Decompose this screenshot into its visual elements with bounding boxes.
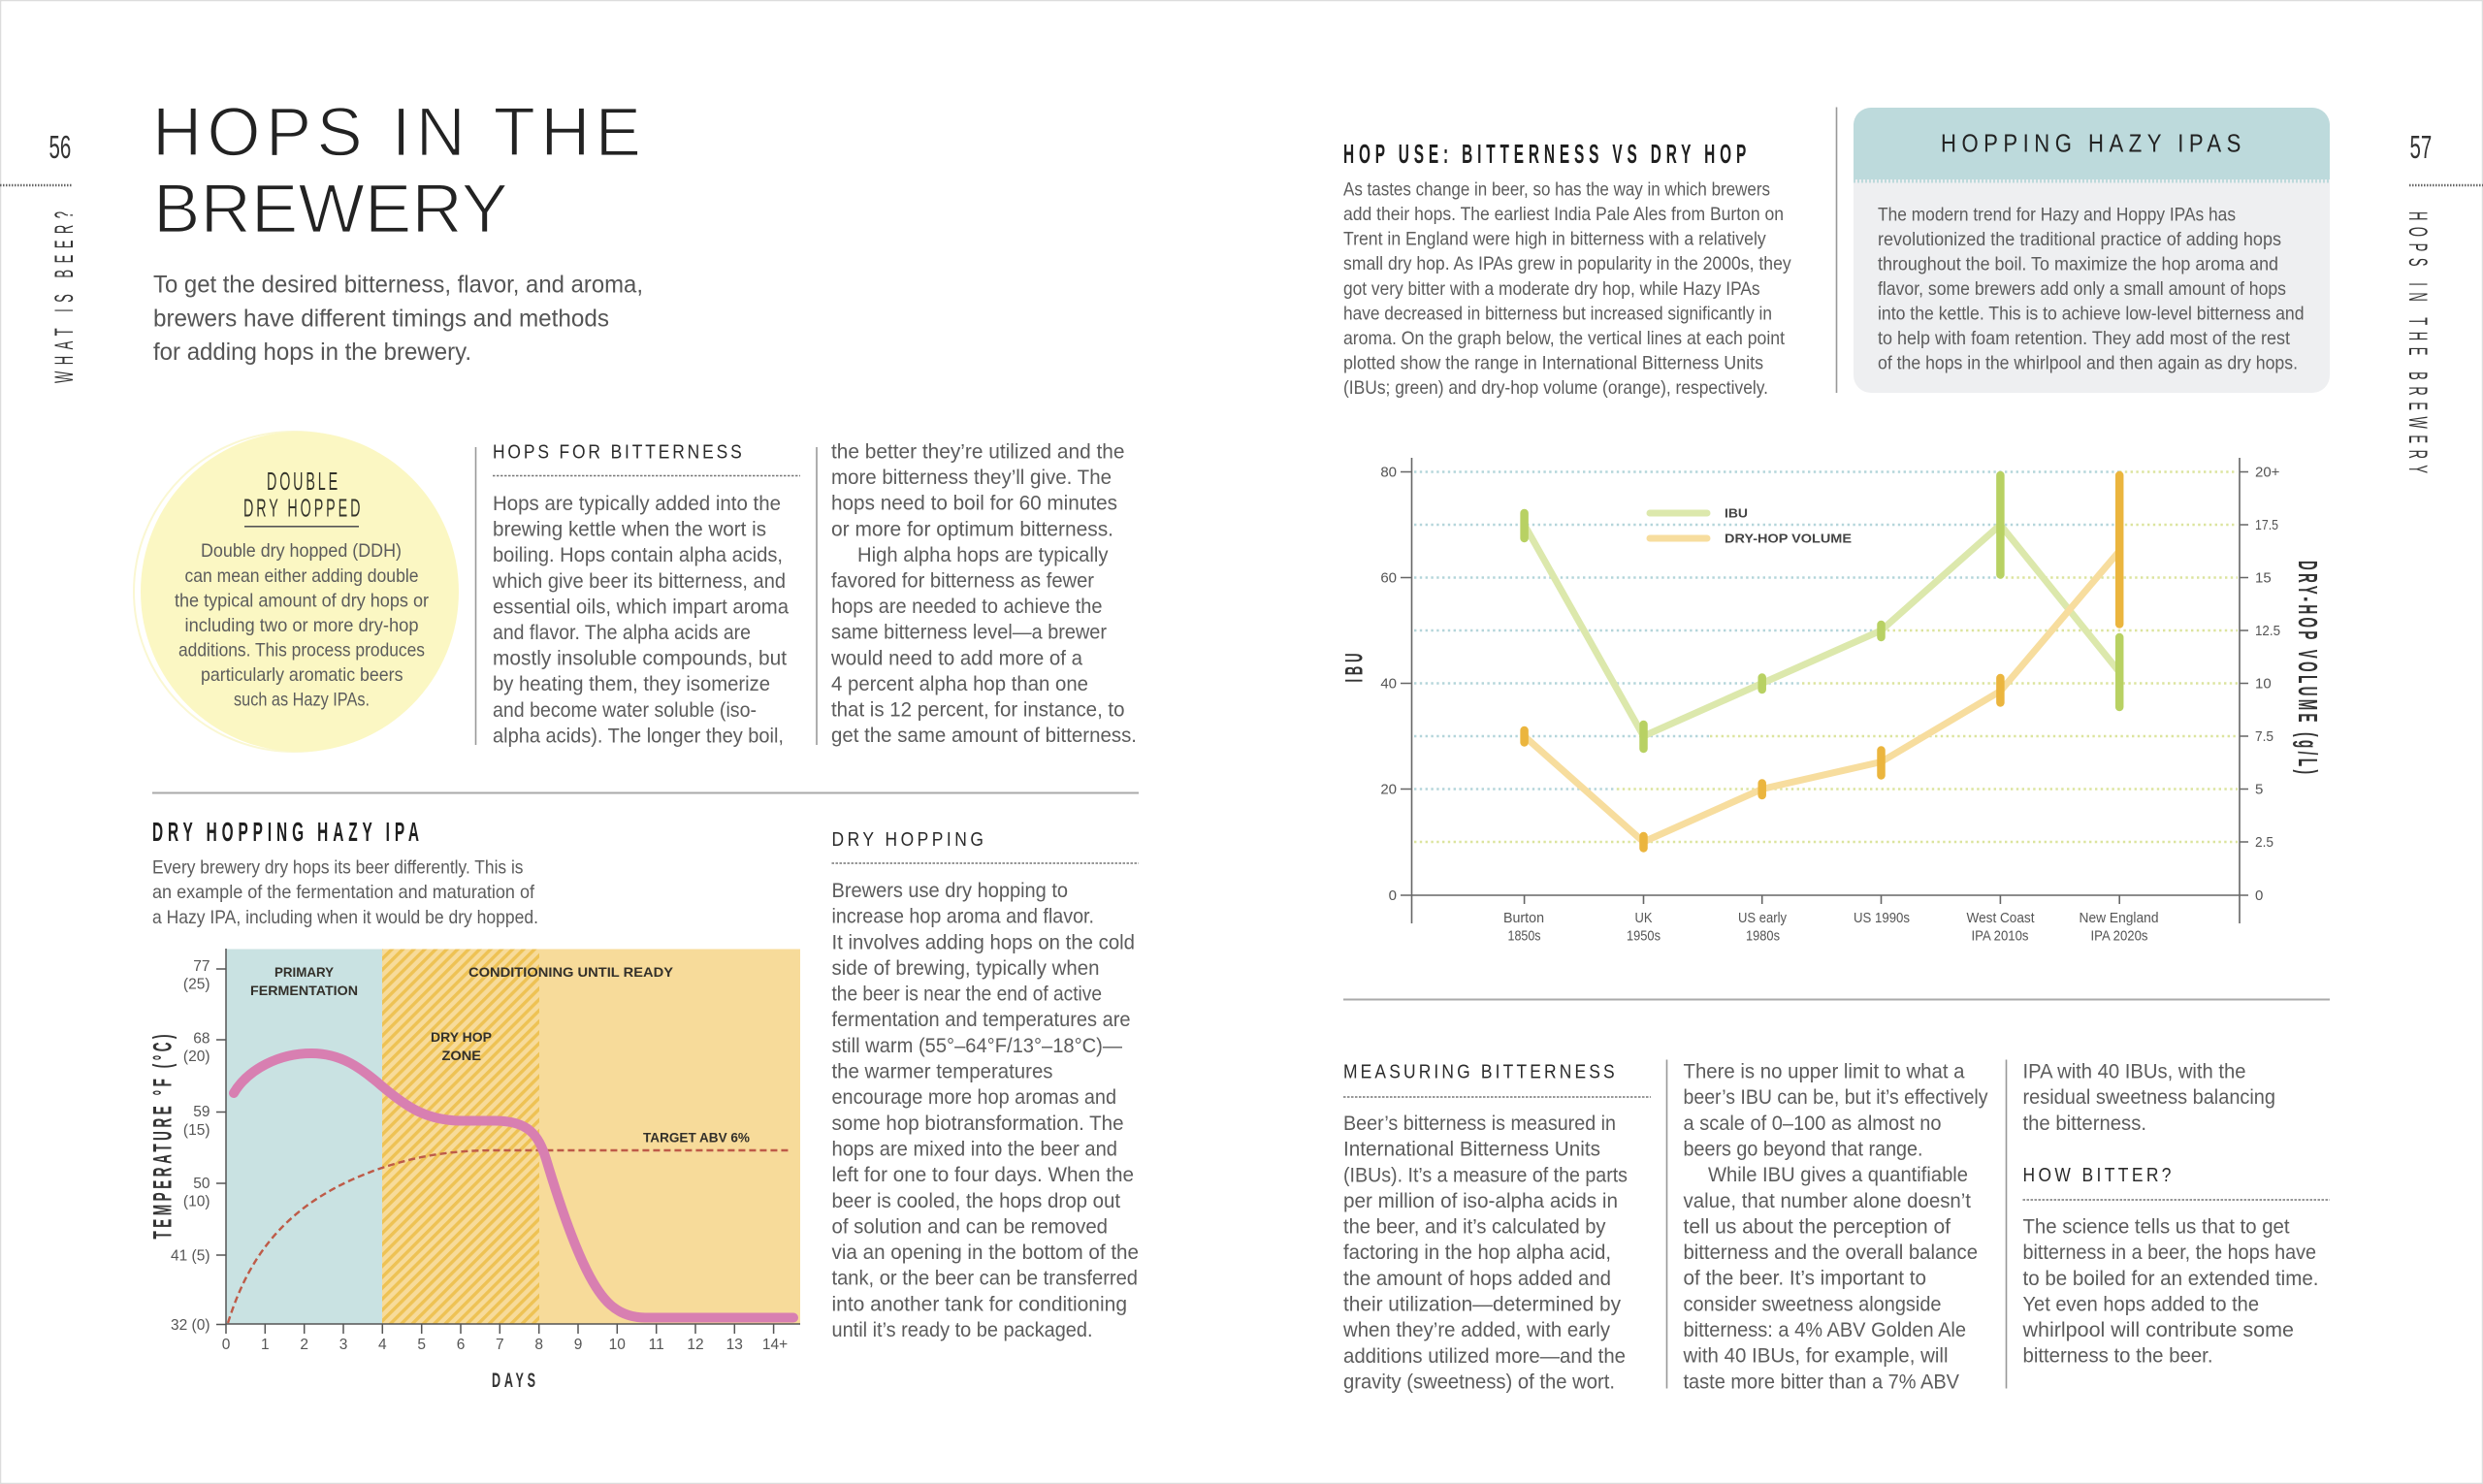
measuring column two: There is no upper limit to what a: [1684, 1061, 1965, 1082]
hop use text: small dry hop. As IPAs grew in popularity in the 2000s, they: [1343, 253, 1791, 274]
panel: how bitter: [2021, 1165, 2330, 1368]
x axis labels: 1950s: [1627, 927, 1661, 945]
right axis labels: 5: [2255, 782, 2263, 797]
title: [152, 95, 641, 248]
dry hopping body: [832, 880, 1139, 1341]
dry hopping body: the beer is near the end of active: [832, 984, 1102, 1006]
hop use text: got very bitter with a moderate dry hop, while Hazy IPAs: [1343, 278, 1760, 300]
dry hopping body: still warm (55°–64°F/13°–18°C)—: [832, 1035, 1122, 1057]
dry hopping body: side of brewing, typically when: [832, 957, 1100, 980]
legend: DRY-HOP VOLUME: [1725, 532, 1852, 545]
body column one: alpha acids). The longer they boil,: [493, 725, 784, 747]
measuring column three: [2023, 1061, 2275, 1135]
dry hopping body: beer is cooled, the hops drop out: [832, 1190, 1120, 1212]
measuring column two: taste more bitter than a 7% ABV: [1684, 1371, 1959, 1393]
axes: [1401, 458, 2248, 923]
dry hopping body: via an opening in the bottom of the: [832, 1242, 1139, 1264]
x axis labels: 7: [496, 1337, 504, 1353]
zone labels: DRY HOP: [431, 1029, 492, 1045]
callout text: of the hops in the whirlpool and then again as dry hops.: [1878, 353, 2298, 374]
body column one: by heating them, they isomerize: [493, 673, 770, 695]
body column one: essential oils, which impart aroma: [493, 596, 789, 618]
measuring column one: (IBUs). It’s a measure of the parts: [1343, 1164, 1628, 1186]
right axis labels: 12.5: [2255, 623, 2280, 639]
left axis labels: 40: [1380, 675, 1397, 693]
measuring column two: a scale of 0–100 as almost no: [1684, 1113, 1942, 1135]
intro text: for adding hops in the brewery.: [153, 339, 471, 366]
circle text: [175, 540, 429, 710]
x axis labels: IPA 2010s: [1971, 927, 2029, 945]
x axis labels: 1850s: [1507, 927, 1540, 945]
heading: hops for bitterness: HOPS FOR BITTERNESS: [493, 441, 742, 464]
dry hopping body: tank, or the beer can be transferred: [832, 1268, 1138, 1290]
axes: [216, 949, 800, 1334]
y axis labels: (10): [183, 1193, 210, 1210]
chart: IBU and dry-hop volume over time: [1341, 458, 2323, 945]
body column two: or more for optimum bitterness.: [831, 518, 1113, 540]
body column two: the better they’re utilized and the: [831, 440, 1125, 464]
callout text: The modern trend for Hazy and Hoppy IPAs has: [1878, 204, 2236, 225]
dry hopping body: increase hop aroma and flavor.: [832, 906, 1094, 928]
how bitter body: whirlpool will contribute some: [2021, 1319, 2294, 1341]
measuring column three: residual sweetness balancing: [2023, 1086, 2275, 1109]
page number: 56: 56: [48, 129, 71, 165]
body column one: and flavor. The alpha acids are: [493, 622, 751, 644]
measuring column one: per million of iso-alpha acids in: [1343, 1190, 1618, 1212]
body column two: [830, 440, 1137, 747]
how bitter body: The science tells us that to get: [2023, 1216, 2290, 1238]
circle text: such as Hazy IPAs.: [234, 689, 370, 710]
y axis labels: 32 (0): [171, 1317, 210, 1334]
x axis labels: 3: [339, 1337, 347, 1353]
panel: double dry hopped circle: [134, 432, 459, 752]
x axis labels: Burton: [1503, 910, 1544, 926]
y axis labels: 68: [193, 1030, 210, 1048]
right axis labels: 10: [2255, 675, 2272, 693]
x axis labels: US early: [1738, 910, 1787, 926]
body column one: Hops are typically added into the: [493, 493, 781, 515]
circle text: additions. This process produces: [178, 640, 425, 661]
right axis labels: 0: [2255, 887, 2263, 904]
line: temperature curve: [234, 1053, 793, 1317]
zone labels: TARGET ABV 6%: [643, 1129, 751, 1145]
line: IBU trend: [1525, 525, 2119, 736]
dry hopping body: some hop biotransformation. The: [832, 1113, 1123, 1135]
panel: measuring bitterness: [1342, 1059, 2275, 1393]
gridlines: [1414, 471, 2238, 842]
zone labels: [250, 964, 751, 1145]
dry hopping body: hops are mixed into the beer and: [832, 1139, 1117, 1160]
x axis labels: 4: [378, 1337, 387, 1353]
callout text: [1878, 204, 2305, 374]
intro text: [153, 272, 643, 366]
x axis title: DAYS: [492, 1369, 535, 1392]
y axis labels: (15): [183, 1122, 210, 1139]
page number: 57: 57: [2409, 129, 2432, 165]
how bitter body: bitterness to the beer.: [2023, 1345, 2213, 1368]
body column two: 4 percent alpha hop than one: [831, 673, 1088, 695]
section label: What is beer?: WHAT IS BEER?: [50, 211, 79, 383]
x axis labels: 9: [574, 1337, 582, 1353]
right axis labels: 2.5: [2255, 834, 2273, 851]
body column two: more bitterness they’ll give. The: [831, 467, 1112, 489]
x axis labels: West Coast: [1967, 910, 2035, 926]
x axis labels: [222, 1337, 788, 1353]
left axis labels: 80: [1380, 464, 1397, 481]
how bitter body: Yet even hops added to the: [2023, 1293, 2259, 1315]
x axis labels: 12: [687, 1337, 704, 1353]
measuring column two: bitterness and the overall balance: [1684, 1242, 1978, 1264]
chart: fermentation and dry hop timeline: [147, 949, 800, 1392]
x axis labels: 13: [726, 1337, 743, 1353]
right axis labels: 7.5: [2255, 728, 2273, 745]
zone: dry hop: [382, 949, 539, 1324]
x axis labels: UK: [1635, 910, 1653, 926]
left axis labels: 0: [1389, 887, 1397, 904]
intro text: brewers have different timings and methods: [153, 305, 609, 332]
callout text: revolutionized the traditional practice of adding hops: [1878, 229, 2281, 250]
heading: measuring bitterness: MEASURING BITTERNESS: [1343, 1061, 1615, 1083]
how bitter body: to be boiled for an extended time.: [2023, 1268, 2318, 1290]
x axis labels: US 1990s: [1854, 910, 1910, 926]
range bars: IBU: [1525, 475, 2119, 749]
chart intro text: Every brewery dry hops its beer differently. This is: [152, 857, 524, 879]
heading: dry hopping hazy ipa: DRY HOPPING HAZY IPA: [152, 817, 419, 847]
body column two: would need to add more of a: [830, 647, 1082, 669]
measuring column one: Beer’s bitterness is measured in: [1343, 1113, 1616, 1135]
hop use text: As tastes change in beer, so has the way in which brewers: [1343, 178, 1770, 200]
circle text: particularly aromatic beers: [201, 664, 403, 686]
y axis labels: (25): [183, 976, 210, 993]
y axis labels: 41 (5): [171, 1247, 210, 1265]
circle heading: [243, 468, 360, 528]
heading: dry hopping: DRY HOPPING: [832, 829, 984, 851]
how bitter body: [2021, 1216, 2318, 1368]
zone: conditioning: [539, 949, 800, 1324]
body column one: [492, 493, 789, 747]
measuring column two: beer’s IBU can be, but it’s effectively: [1684, 1086, 1988, 1109]
hop use text: have decreased in bitterness but increased significantly in: [1343, 303, 1772, 324]
measuring column two: [1683, 1061, 1988, 1393]
body column two: hops are needed to achieve the: [831, 596, 1102, 618]
zone labels: ZONE: [442, 1048, 481, 1063]
y axis labels: 77: [193, 958, 210, 975]
x axis labels: 5: [417, 1337, 426, 1353]
callout: hopping hazy ipas: [1854, 108, 2330, 393]
measuring column two: While IBU gives a quantifiable: [1708, 1164, 1968, 1186]
x axis labels: 8: [534, 1337, 543, 1353]
zone labels: FERMENTATION: [250, 983, 358, 998]
body column one: boiling. Hops contain alpha acids,: [493, 544, 783, 566]
measuring column one: when they’re added, with early: [1342, 1319, 1610, 1341]
right axis labels: [2255, 464, 2280, 904]
dry hopping body: Brewers use dry hopping to: [832, 880, 1068, 902]
heading: how bitter: HOW BITTER?: [2023, 1165, 2172, 1186]
x axis labels: 0: [222, 1337, 231, 1353]
hop use text: aroma. On the graph below, the vertical lines at each point: [1343, 328, 1786, 349]
dry hopping body: into another tank for conditioning: [832, 1293, 1127, 1315]
heading: hop use: HOP USE: BITTERNESS VS DRY HOP: [1343, 139, 1746, 169]
x axis labels: 11: [649, 1337, 664, 1353]
y axis labels: [171, 958, 210, 1334]
measuring column two: consider sweetness alongside: [1684, 1293, 1942, 1315]
callout text: to help with foam retention. They add most of the rest: [1878, 328, 2291, 349]
measuring column two: tell us about the perception of: [1684, 1215, 1951, 1238]
hop use text: add their hops. The earliest India Pale Ales from Burton on: [1343, 204, 1784, 225]
body column one: and become water soluble (iso-: [493, 699, 757, 722]
right axis labels: 20+: [2255, 464, 2280, 481]
measuring column one: factoring in the hop alpha acid,: [1343, 1242, 1611, 1264]
hop use text: Trent in England were high in bitterness with a relatively: [1343, 229, 1766, 250]
chart intro text: an example of the fermentation and maturation of: [152, 882, 535, 903]
circle text: Double dry hopped (DDH): [201, 540, 402, 562]
right axis labels: 15: [2255, 570, 2272, 586]
measuring column three: IPA with 40 IBUs, with the: [2023, 1061, 2246, 1082]
x axis labels: 2: [300, 1337, 308, 1353]
section label: Hops in the brewery: HOPS IN THE BREWERY: [2403, 211, 2432, 473]
body column two: get the same amount of bitterness.: [831, 725, 1137, 747]
hop use text: (IBUs; green) and dry-hop volume (orange), respectively.: [1343, 377, 1768, 399]
x axis labels: 10: [609, 1337, 626, 1353]
chart intro text: a Hazy IPA, including when it would be dry hopped.: [152, 907, 538, 928]
circle text: the typical amount of dry hops or: [175, 590, 429, 611]
y axis labels: 50: [193, 1176, 210, 1192]
x axis labels: New England: [2080, 910, 2159, 926]
measuring column one: [1342, 1113, 1628, 1393]
circle text: including two or more dry-hop: [184, 615, 419, 636]
body column two: that is 12 percent, for instance, to: [831, 698, 1125, 722]
hop use text: plotted show the range in International Bitterness Units: [1343, 353, 1763, 374]
zone labels: PRIMARY: [274, 964, 335, 980]
dry hopping body: the warmer temperatures: [832, 1061, 1053, 1082]
callout text: into the kettle. This is to achieve low-level bitterness and: [1878, 303, 2305, 324]
circle heading: DOUBLE: [267, 468, 338, 496]
x axis labels: 1: [261, 1337, 270, 1353]
measuring column two: of the beer. It’s important to: [1684, 1268, 1926, 1290]
chart intro text: [152, 857, 538, 928]
measuring column one: additions utilized more—and the: [1343, 1345, 1626, 1368]
legend: [1650, 506, 1852, 545]
x axis labels: 14+: [762, 1337, 788, 1353]
body column two: same bitterness level—a brewer: [831, 622, 1107, 644]
line: dry-hop trend: [1525, 551, 2119, 842]
legend: IBU: [1725, 506, 1748, 520]
measuring column one: the amount of hops added and: [1343, 1268, 1611, 1290]
how bitter body: bitterness in a beer, the hops have: [2023, 1242, 2316, 1264]
body column one: mostly insoluble compounds, but: [493, 648, 787, 670]
y axis labels: (20): [183, 1048, 210, 1065]
title: BREWERY: [153, 171, 508, 248]
hop use text: [1343, 178, 1791, 399]
callout text: flavor, some brewers add only a small amount of hops: [1878, 278, 2286, 300]
panel: hops for bitterness: [475, 440, 1137, 747]
title: HOPS IN THE: [152, 95, 641, 171]
measuring column two: beers go beyond that range.: [1684, 1139, 1922, 1160]
body column one: which give beer its bitterness, and: [492, 570, 786, 593]
circle text: can mean either adding double: [184, 565, 419, 587]
left axis title: IBU: [1341, 654, 1369, 683]
body column one: brewing kettle when the wort is: [493, 519, 766, 541]
dry hopping body: until it’s ready to be packaged.: [832, 1319, 1092, 1341]
dry hopping body: of solution and can be removed: [832, 1215, 1108, 1238]
callout heading: HOPPING HAZY IPAS: [1941, 130, 2241, 158]
measuring column three: the bitterness.: [2023, 1113, 2146, 1135]
y axis title: TEMPERATURE °F (°C): [147, 1035, 177, 1240]
left axis labels: 20: [1380, 782, 1397, 797]
measuring column two: value, that number alone doesn’t: [1684, 1190, 1971, 1212]
intro text: To get the desired bitterness, flavor, and aroma,: [153, 272, 643, 299]
measuring column two: with 40 IBUs, for example, will: [1683, 1345, 1948, 1368]
measuring column one: gravity (sweetness) of the wort.: [1343, 1371, 1615, 1393]
body column two: hops need to boil for 60 minutes: [831, 493, 1117, 515]
right axis labels: 17.5: [2255, 517, 2278, 533]
range bars: dry hop: [1525, 475, 2119, 848]
left axis labels: 60: [1380, 570, 1397, 586]
line: target ABV dashed curve: [228, 1150, 791, 1323]
left axis labels: [1380, 464, 1397, 904]
zone labels: CONDITIONING UNTIL READY: [468, 964, 674, 980]
dry hopping body: encourage more hop aromas and: [832, 1086, 1116, 1109]
panel: dry hopping text: [832, 829, 1139, 1341]
body column two: favored for bitterness as fewer: [831, 570, 1094, 592]
measuring column one: the beer, and it’s calculated by: [1343, 1216, 1606, 1239]
measuring column one: International Bitterness Units: [1343, 1139, 1600, 1161]
measuring column two: bitterness: a 4% ABV Golden Ale: [1684, 1319, 1966, 1341]
measuring column one: their utilization—determined by: [1343, 1294, 1621, 1315]
dry hopping body: It involves adding hops on the cold: [832, 931, 1135, 953]
x axis labels: IPA 2020s: [2091, 927, 2147, 945]
x axis labels: 1980s: [1746, 927, 1780, 945]
x axis labels: [1503, 910, 2159, 945]
right axis title: DRY-HOP VOLUME (g/L): [2293, 561, 2323, 774]
dry hopping body: fermentation and temperatures are: [832, 1009, 1131, 1031]
callout text: throughout the boil. To maximize the hop aroma and: [1878, 254, 2278, 275]
y axis labels: 59: [193, 1104, 210, 1120]
zone: primary fermentation: [226, 949, 382, 1324]
x axis labels: 6: [457, 1337, 465, 1353]
dry hopping body: left for one to four days. When the: [832, 1164, 1134, 1186]
circle heading: DRY HOPPED: [243, 495, 360, 523]
body column two: High alpha hops are typically: [857, 544, 1109, 566]
